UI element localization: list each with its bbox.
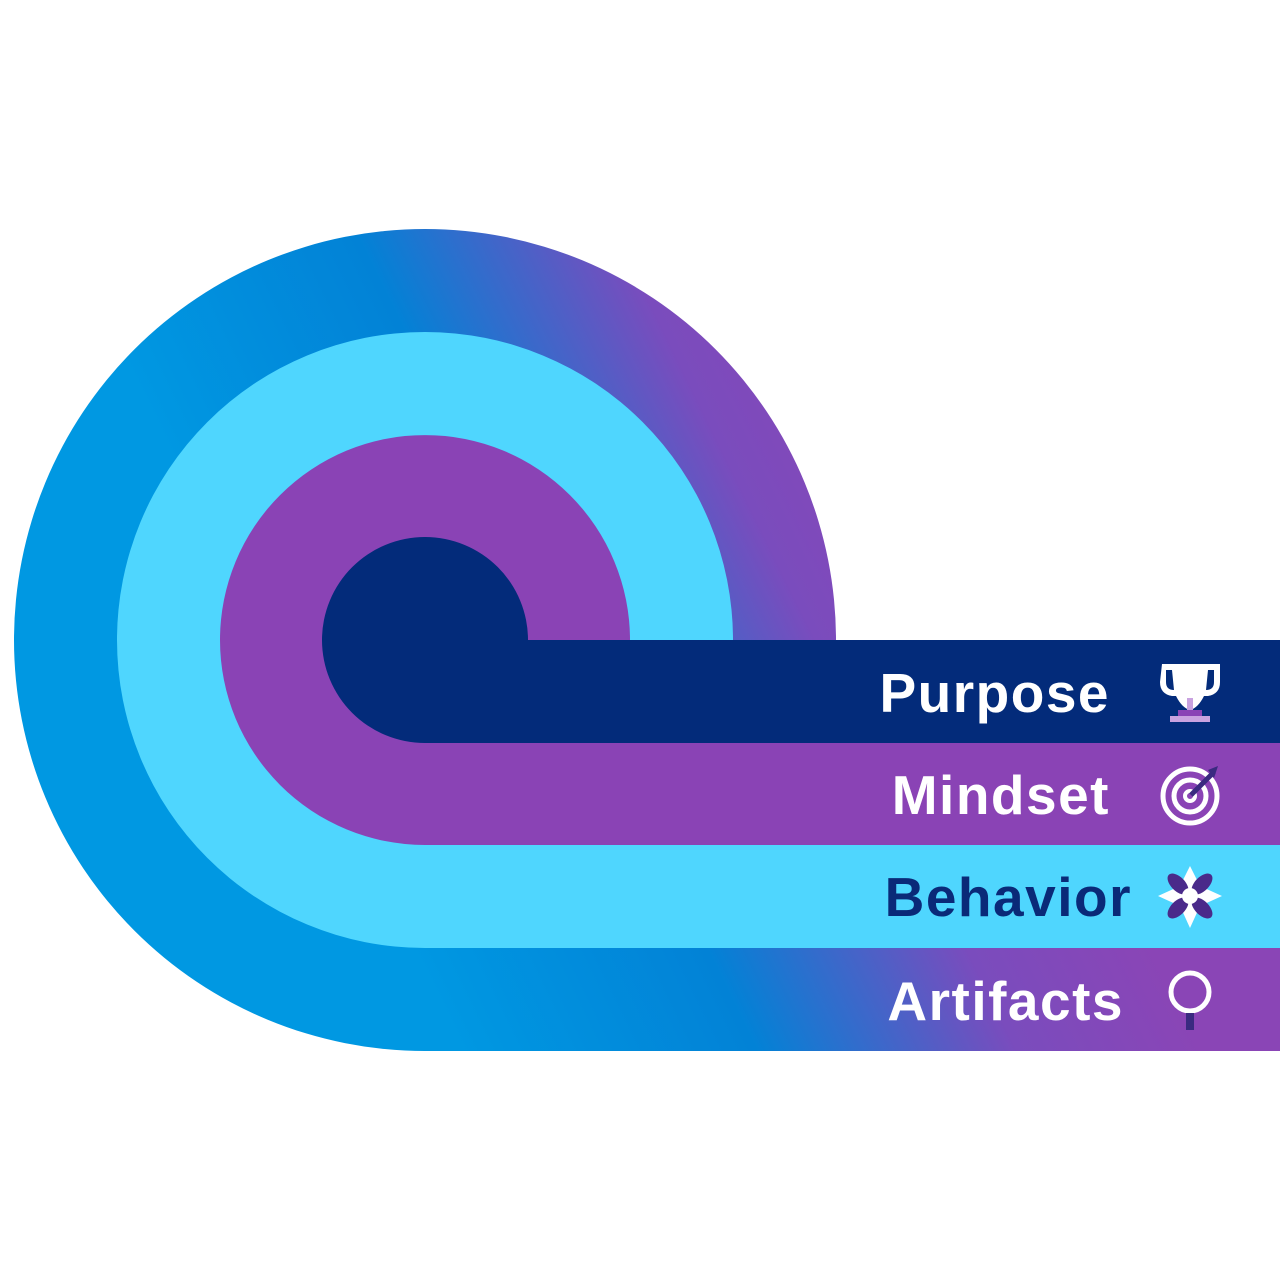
- layer: behavior band: [117, 332, 1280, 948]
- icon: trophy: [1160, 664, 1220, 722]
- layer: mindset band: [220, 435, 1280, 845]
- label: Artifacts: Artifacts: [887, 970, 1124, 1032]
- icon: flower: [1158, 866, 1222, 928]
- layer: artifacts outer band: [14, 229, 1280, 1051]
- icon: magnifier: [1171, 973, 1209, 1030]
- label: Behavior: Behavior: [885, 866, 1132, 928]
- icon: target: [1163, 766, 1218, 823]
- layer: purpose band: [322, 537, 1280, 743]
- label: Mindset: Mindset: [892, 764, 1110, 826]
- label: Purpose: Purpose: [879, 662, 1110, 724]
